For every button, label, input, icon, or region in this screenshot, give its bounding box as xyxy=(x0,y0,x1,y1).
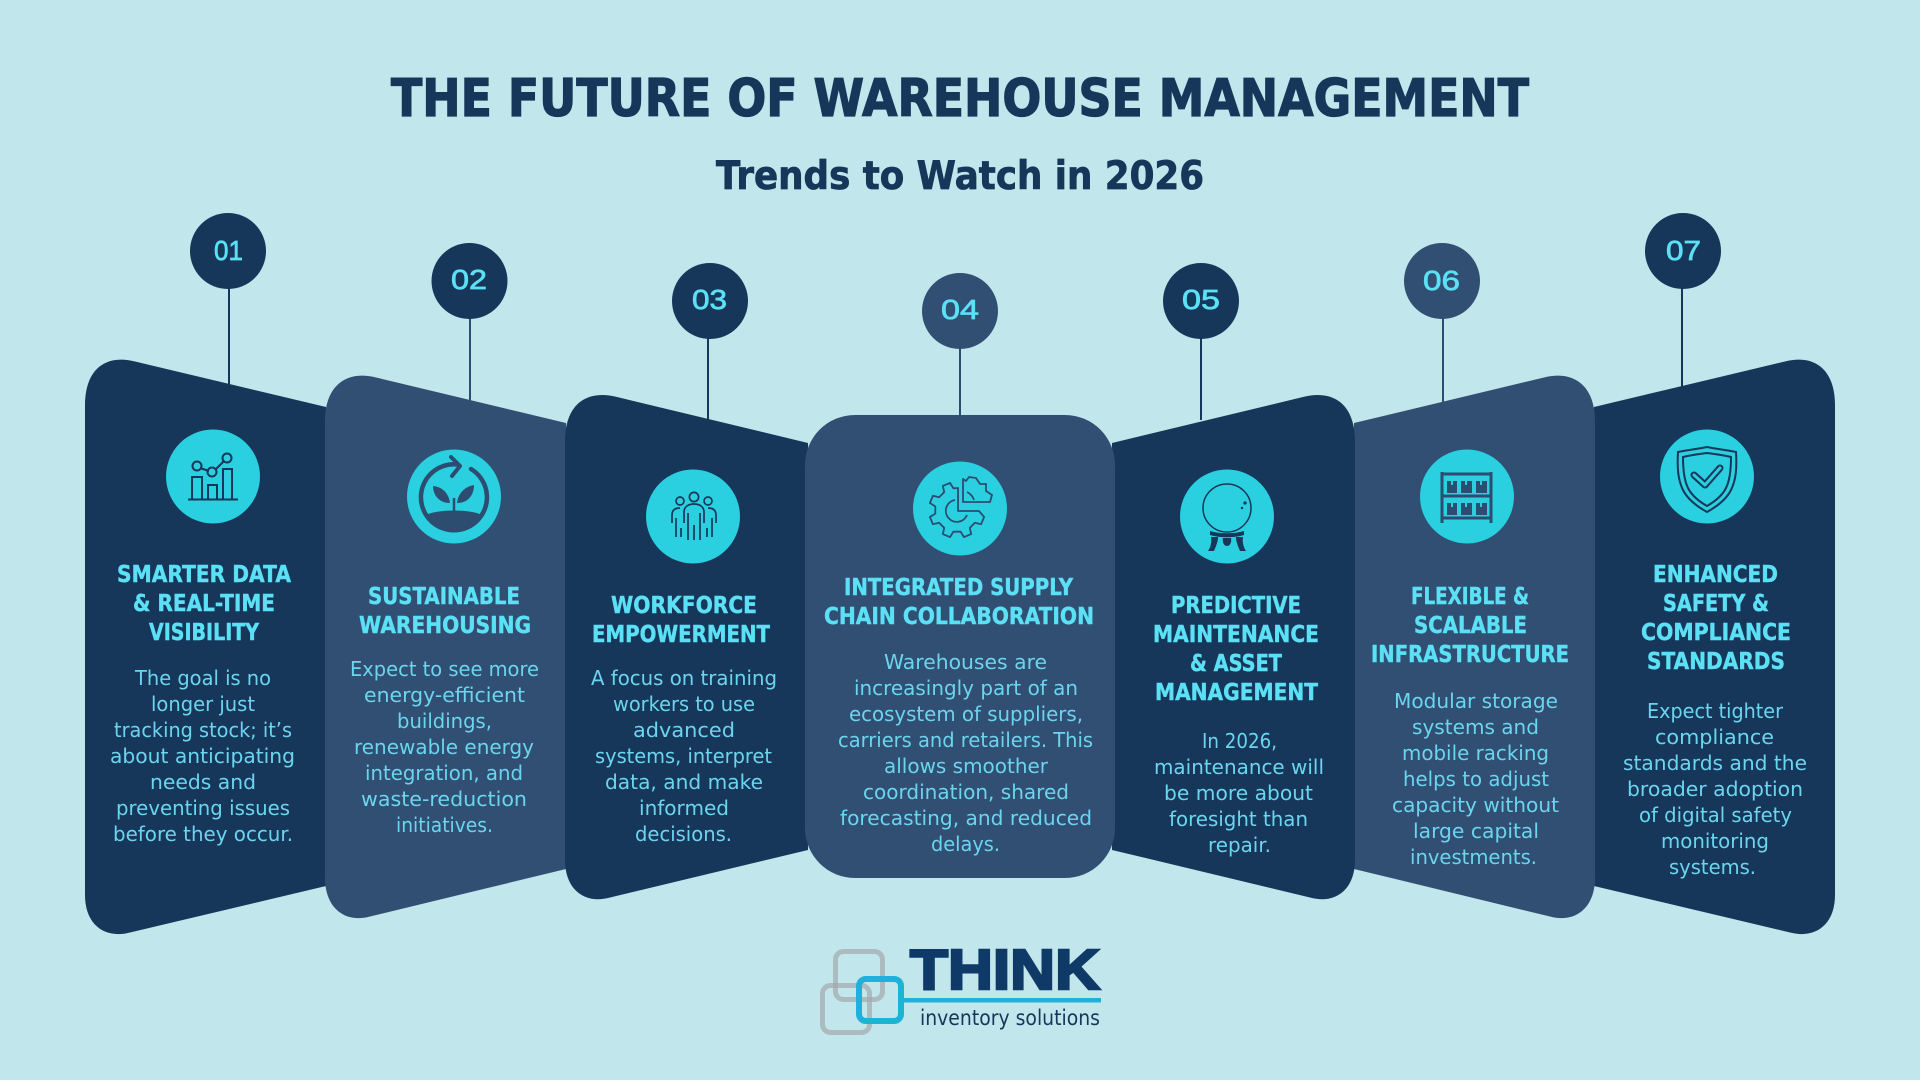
card shape 03 xyxy=(565,395,808,899)
heading 01: VISIBILITY xyxy=(149,620,259,646)
body text 01 xyxy=(110,666,295,846)
connector line 02 xyxy=(469,310,471,404)
card shape 05 xyxy=(1112,395,1355,899)
body text 07: standards and the xyxy=(1623,751,1807,775)
icon: bar chart with trend line xyxy=(166,430,260,524)
heading 07: SAFETY & xyxy=(1663,591,1769,617)
body text 06: mobile racking xyxy=(1402,741,1549,765)
heading 01 xyxy=(117,562,291,646)
body text 07: of digital safety xyxy=(1639,803,1792,827)
icon: warehouse shelves with boxes xyxy=(1420,450,1514,544)
body text 03: informed xyxy=(639,796,729,820)
heading 04: INTEGRATED SUPPLY xyxy=(844,575,1073,601)
body text 03: data, and make xyxy=(605,770,763,794)
heading 01: SMARTER DATA xyxy=(117,562,291,588)
icon: group of workers xyxy=(646,470,740,564)
heading 05: MANAGEMENT xyxy=(1155,680,1318,706)
logo mark: overlapping squares xyxy=(822,952,901,1032)
card shape 02 xyxy=(325,376,566,918)
card shape 01 xyxy=(85,360,326,934)
body text 03: workers to use xyxy=(613,692,755,716)
body text 06: capacity without xyxy=(1392,793,1559,817)
icon: safety shield with check xyxy=(1660,430,1754,524)
body text 04: allows smoother xyxy=(884,754,1049,778)
icon: crystal ball xyxy=(1180,470,1274,564)
body text 02: renewable energy xyxy=(354,735,534,759)
heading 03: EMPOWERMENT xyxy=(592,622,770,648)
body text 01: preventing issues xyxy=(116,796,290,820)
heading 06: INFRASTRUCTURE xyxy=(1371,642,1569,668)
heading 01: & REAL-TIME xyxy=(133,591,275,617)
logo wordmark: THINK xyxy=(910,938,1100,1002)
connector line 07 xyxy=(1681,280,1683,387)
body text 05: be more about xyxy=(1164,781,1313,805)
heading 02: SUSTAINABLE xyxy=(368,584,520,610)
connector line 05 xyxy=(1200,330,1202,420)
body text 01: needs and xyxy=(150,770,256,794)
connector line 03 xyxy=(707,330,709,420)
body text 07: broader adoption xyxy=(1627,777,1803,801)
panel 01: smarter data xyxy=(85,213,326,934)
title: THE FUTURE OF WAREHOUSE MANAGEMENT xyxy=(391,69,1529,129)
panel 05: predictive maintenance xyxy=(1112,263,1355,899)
body text 05 xyxy=(1154,729,1324,857)
body text 02: waste-reduction xyxy=(361,787,527,811)
body text 06: investments. xyxy=(1410,845,1537,869)
connector line 06 xyxy=(1442,310,1444,404)
body text 02 xyxy=(350,657,539,837)
body text 01: longer just xyxy=(151,692,255,716)
body text 06: helps to adjust xyxy=(1403,767,1549,791)
logo tagline: inventory solutions xyxy=(920,1006,1100,1030)
body text 05: foresight than xyxy=(1169,807,1308,831)
heading 06 xyxy=(1371,584,1569,668)
heading 02 xyxy=(359,584,531,639)
heading 07 xyxy=(1641,562,1791,675)
panel 02: sustainable warehousing xyxy=(325,243,566,918)
heading 03: WORKFORCE xyxy=(611,593,757,619)
number badge 03: 03 xyxy=(692,284,727,315)
number badge 06: 06 xyxy=(1423,265,1460,296)
subtitle: Trends to Watch in 2026 xyxy=(716,154,1204,199)
heading 06: FLEXIBLE & xyxy=(1411,584,1529,610)
body text 04: carriers and retailers. This xyxy=(838,728,1093,752)
connector line 04 xyxy=(959,340,961,416)
body text 01: The goal is no xyxy=(134,666,271,690)
heading 06: SCALABLE xyxy=(1414,613,1527,639)
card shape 04 xyxy=(805,415,1115,878)
heading 05: MAINTENANCE xyxy=(1153,622,1319,648)
body text 03: advanced xyxy=(633,718,735,742)
heading 07: STANDARDS xyxy=(1647,649,1785,675)
body text 02: initiatives. xyxy=(396,813,493,837)
number badge 02: 02 xyxy=(451,264,487,295)
heading 02: WAREHOUSING xyxy=(359,613,531,639)
body text 07: monitoring xyxy=(1661,829,1769,853)
body text 07: Expect tighter xyxy=(1647,699,1784,723)
number badge 03 xyxy=(672,263,748,339)
body text 05: In 2026, xyxy=(1202,729,1277,753)
body text 04: Warehouses are xyxy=(884,650,1047,674)
body text 07: systems. xyxy=(1669,855,1756,879)
body text 06: large capital xyxy=(1413,819,1539,843)
number badge 01 xyxy=(190,213,266,289)
panel 03: workforce empowerment xyxy=(565,263,808,899)
panel 04: integrated supply chain xyxy=(805,273,1115,878)
body text 07: compliance xyxy=(1655,725,1774,749)
body text 02: integration, and xyxy=(365,761,523,785)
body text 06: Modular storage xyxy=(1394,689,1558,713)
body text 02: Expect to see more xyxy=(350,657,539,681)
panel 07: safety and compliance xyxy=(1594,213,1835,934)
body text 03 xyxy=(591,666,777,846)
heading 04: CHAIN COLLABORATION xyxy=(824,604,1094,630)
body text 02: buildings, xyxy=(397,709,492,733)
body text 04: ecosystem of suppliers, xyxy=(849,702,1083,726)
body text 04: increasingly part of an xyxy=(854,676,1078,700)
heading 05 xyxy=(1153,593,1319,706)
number badge 07: 07 xyxy=(1666,235,1701,266)
panel 06: flexible infrastructure xyxy=(1354,243,1595,918)
heading 04 xyxy=(824,575,1094,630)
logo: Think Inventory Solutions xyxy=(822,938,1101,1032)
body text 04: coordination, shared xyxy=(863,780,1069,804)
body text 01: before they occur. xyxy=(113,822,293,846)
body text 05: maintenance will xyxy=(1154,755,1324,779)
heading 07: ENHANCED xyxy=(1653,562,1778,588)
heading 05: PREDICTIVE xyxy=(1171,593,1301,619)
body text 04 xyxy=(838,650,1093,856)
heading 03 xyxy=(592,593,770,648)
card shape 07 xyxy=(1594,360,1835,934)
number badge 04: 04 xyxy=(941,294,979,325)
heading 07: COMPLIANCE xyxy=(1641,620,1791,646)
body text 06: systems and xyxy=(1412,715,1539,739)
logo underline xyxy=(904,998,1101,1002)
body text 03: decisions. xyxy=(635,822,732,846)
number badge 05 xyxy=(1163,263,1239,339)
icon: plant with recycling arrow xyxy=(407,450,501,544)
body text 03: A focus on training xyxy=(591,666,777,690)
body text 04: delays. xyxy=(931,832,1000,856)
heading 05: & ASSET xyxy=(1190,651,1282,677)
body text 04: forecasting, and reduced xyxy=(840,806,1092,830)
body text 03: systems, interpret xyxy=(595,744,772,768)
number badge 04 xyxy=(922,273,998,349)
body text 06 xyxy=(1392,689,1559,869)
body text 01: about anticipating xyxy=(110,744,295,768)
body text 02: energy-efficient xyxy=(364,683,525,707)
number badge 06 xyxy=(1404,243,1480,319)
number badge 01: 01 xyxy=(214,235,243,266)
card shape 06 xyxy=(1354,376,1595,918)
number badge 05: 05 xyxy=(1182,284,1220,315)
number badge 02 xyxy=(432,243,508,319)
body text 05: repair. xyxy=(1208,833,1271,857)
body text 07 xyxy=(1623,699,1807,879)
connector line 01 xyxy=(228,280,230,386)
icon: gear with detached segment xyxy=(913,462,1007,556)
number badge 07 xyxy=(1645,213,1721,289)
body text 01: tracking stock; it’s xyxy=(114,718,292,742)
